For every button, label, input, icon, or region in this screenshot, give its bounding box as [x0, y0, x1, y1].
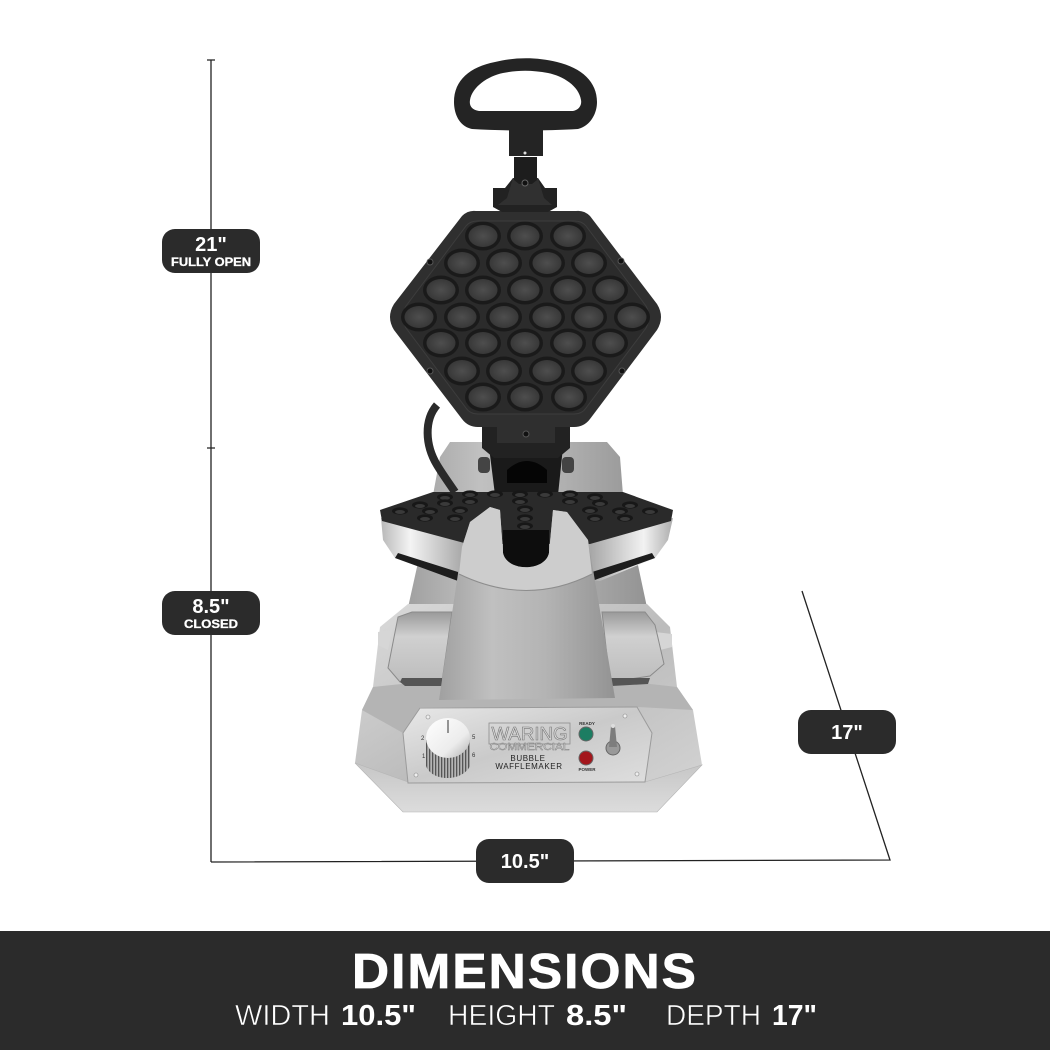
- badge: 21 inch fully open: 21": [195, 234, 227, 256]
- badge: 17 inch depth: 17": [831, 722, 863, 744]
- left drip tray: [378, 612, 452, 686]
- waring logo: COMMERCIAL: [490, 742, 570, 753]
- badge: 21 inch fully open: FULLY OPEN: [171, 257, 251, 269]
- waffle maker product: [355, 58, 702, 812]
- model name: WAFFLEMAKER: [495, 762, 563, 771]
- ready light: READY: [579, 721, 595, 726]
- top bracket and handle stem: [493, 118, 557, 212]
- knob: [426, 718, 470, 778]
- base lower facets: [362, 680, 693, 733]
- ready light: [579, 721, 595, 741]
- width and depth dimension lines: [211, 591, 890, 862]
- footer specs: 8.5": [566, 1000, 627, 1032]
- badge: 8.5 inch closed: 8.5": [192, 596, 230, 618]
- hinge: [478, 447, 574, 495]
- footer specs: HEIGHT: [448, 1000, 555, 1032]
- footer specs: 10.5": [341, 1000, 416, 1032]
- footer title: DIMENSIONS: [352, 944, 698, 999]
- lower cooking plate: [380, 490, 673, 544]
- waring logo: WARING: [492, 723, 568, 744]
- model name: BUBBLE: [510, 754, 546, 763]
- footer specs: 17": [772, 1000, 817, 1032]
- badge: 8.5 inch closed: CLOSED: [184, 619, 238, 631]
- power cord: [428, 405, 455, 492]
- footer band: [0, 931, 1050, 1050]
- plate screws: [427, 258, 625, 437]
- footer specs: [235, 1000, 817, 1032]
- badge: 10.5 inch width: 10.5": [501, 851, 549, 873]
- footer specs: WIDTH: [235, 1000, 330, 1032]
- knob numbers: 6: [472, 753, 476, 759]
- knob numbers: [421, 735, 476, 760]
- model name: [495, 754, 563, 771]
- panel screws: [414, 714, 639, 777]
- power light: POWER: [578, 767, 596, 772]
- waring logo: [489, 723, 570, 753]
- base bottom strip: [355, 763, 702, 812]
- toggle switch: [606, 724, 620, 755]
- right drip tray: [602, 612, 672, 686]
- lower hinge bracket: [482, 423, 570, 458]
- knob numbers: 5: [472, 735, 476, 741]
- footer specs: DEPTH: [666, 1000, 761, 1032]
- center stand: [439, 507, 615, 700]
- badge: 10.5 inch width: [476, 839, 574, 883]
- base housing: [355, 604, 702, 812]
- knob numbers: 1: [422, 754, 426, 760]
- power light: [578, 751, 596, 772]
- badge: 8.5 inch closed: [162, 591, 260, 635]
- height dimension line: [207, 60, 215, 862]
- control panel: [403, 707, 652, 783]
- knob numbers: 2: [421, 736, 425, 742]
- badge: 17 inch depth: [798, 710, 896, 754]
- handle: [454, 58, 597, 130]
- bubble moulds: [401, 222, 650, 412]
- top cooking plate: [390, 211, 661, 443]
- rear body: [407, 442, 648, 612]
- lower plate underside shadow: [395, 553, 655, 581]
- lower plate metal band: [381, 518, 673, 581]
- badge: 21 inch fully open: [162, 229, 260, 273]
